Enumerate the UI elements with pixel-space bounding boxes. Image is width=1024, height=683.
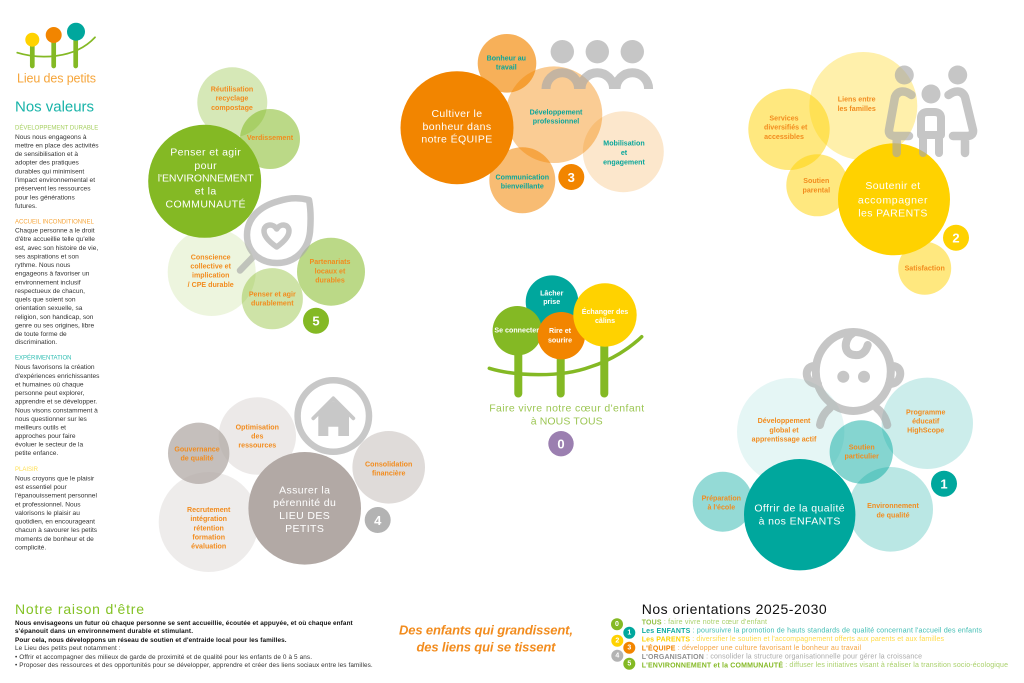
heading: parents: accompagner	[858, 194, 928, 206]
heading: équipe	[421, 108, 493, 146]
value: accueil inconditionnel: est, avec son histoire de vie,	[15, 245, 98, 252]
value: expérimentation: et humaines où chaque	[15, 382, 84, 388]
badge 0: 0	[557, 436, 565, 452]
tree labels: prise	[543, 298, 560, 306]
labels: environnement: Partenariats	[309, 258, 351, 266]
value: accueil inconditionnel: ses aspirations et son	[15, 253, 79, 260]
labels: parents: Liens entre	[838, 96, 876, 104]
labels: enfants: Préparation	[702, 494, 741, 502]
heading: organisation: pérennité du	[273, 497, 336, 509]
labels: parents: diversifiés et	[764, 124, 808, 132]
panel: enfants	[693, 332, 973, 570]
panel: environnement	[148, 67, 365, 334]
labels: organisation: évaluation	[191, 543, 226, 551]
heading: environnement: et la	[195, 186, 217, 198]
labels: équipe: Développement	[530, 108, 583, 116]
icon: baby	[807, 332, 900, 425]
heading: environnement: pour	[194, 160, 217, 172]
value: plaisir	[15, 467, 98, 552]
labels: parents	[764, 96, 945, 272]
labels: enfants: global et	[769, 426, 799, 434]
panel: nous tous	[489, 275, 644, 456]
value: accueil inconditionnel: de toute forme de	[15, 331, 67, 338]
value: expérimentation: EXPÉRIMENTATION	[15, 355, 71, 362]
value: expérimentation: personne peut explorer,	[15, 390, 84, 397]
tree labels: Rire et	[549, 327, 572, 335]
legend badges: 2	[615, 637, 619, 644]
panel: parents	[748, 52, 973, 295]
value: expérimentation: petite enfance.	[15, 450, 58, 457]
value: développement durable: pour les générations	[15, 194, 75, 201]
labels: équipe: et	[621, 149, 628, 157]
value: accueil inconditionnel: d'être accueillie telle qu'elle	[15, 236, 95, 243]
value: plaisir: quotidien, en encourageant	[15, 519, 95, 526]
labels: enfants: HighScope	[907, 427, 944, 435]
heading: nous tous: Faire vivre notre cœur d'enfant	[489, 403, 644, 415]
value: accueil inconditionnel: genre ou ses origines, libre	[15, 322, 95, 330]
labels: organisation: Recrutement	[187, 506, 231, 514]
value: expérimentation: apprendre et se développer.	[15, 399, 97, 406]
legend lines: L'ÉQUIPE : développer une culture favorisant le bonheur au travail	[642, 643, 861, 652]
heading: enfants: à nos ENFANTS	[759, 516, 841, 528]
tree labels: câlins	[595, 317, 615, 325]
labels: environnement: / CPE durable	[188, 281, 234, 289]
labels: organisation: Consolidation	[365, 460, 412, 468]
labels: enfants: de qualité	[876, 511, 910, 519]
tree labels: Se connecter	[494, 326, 539, 334]
labels: parents: Satisfaction	[905, 264, 945, 272]
value: expérimentation: évoluer le secteur de la	[15, 442, 84, 449]
legend lines: L'ENVIRONNEMENT et la COMMUNAUTÉ : diffuser les initiatives visant à réaliser la transition socio-écologique	[642, 660, 1008, 669]
value: expérimentation: Nous favorisons la création	[15, 364, 95, 371]
labels: enfants: éducatif	[912, 418, 940, 426]
circles: environnement	[148, 67, 365, 329]
heading: environnement: COMMUNAUTÉ	[165, 197, 246, 210]
value: plaisir: complicité.	[15, 544, 46, 552]
labels: enfants: à l'école	[707, 503, 735, 511]
legend badges: 3	[627, 644, 631, 651]
heading: nous tous: à NOUS TOUS	[531, 416, 603, 428]
labels: environnement: compostage	[211, 104, 253, 112]
value: plaisir: valorisons le plaisir au	[15, 510, 80, 517]
tagline: Des enfants qui grandissent,	[399, 622, 573, 638]
labels: environnement: recyclage	[216, 95, 248, 103]
labels: enfants: apprentissage actif	[752, 435, 817, 443]
legend badges: 5	[627, 660, 631, 667]
labels: équipe: travail	[496, 64, 517, 72]
labels: équipe: Mobilisation	[603, 140, 645, 148]
labels: environnement: Réutilisation	[211, 85, 253, 93]
tree circles	[493, 275, 637, 359]
badge 3	[558, 164, 584, 190]
heading: enfants: Offrir de la qualité	[754, 503, 845, 515]
heading: parents: les PARENTS	[858, 207, 928, 219]
value: accueil inconditionnel: Chaque personne a le droit	[15, 228, 95, 234]
heading: environnement: l'ENVIRONNEMENT	[158, 173, 254, 185]
labels: environnement: locaux et	[315, 267, 346, 275]
labels: environnement: Penser et agir	[249, 291, 296, 299]
value: plaisir: moments de bonheur et de	[15, 536, 94, 543]
labels: parents: accessibles	[764, 133, 804, 141]
tree labels: Échanger des	[582, 307, 628, 316]
text block: raison d'être: Le Lieu des petits peut notamment :	[15, 645, 121, 652]
labels: organisation: formation	[192, 533, 225, 541]
value: développement durable: Nous nous engageons à	[15, 134, 87, 141]
labels: équipe	[487, 54, 646, 190]
heading: environnement: Penser et agir	[170, 147, 241, 159]
value: développement durable: futures.	[15, 203, 37, 210]
legend lines: Les PARENTS : diversifier le soutien et l'accompagnement offerts aux parents et aux familles	[642, 636, 944, 643]
panel: organisation	[159, 380, 425, 572]
value: plaisir: et professionnel. Nous	[15, 501, 81, 508]
heading: parents: Soutenir et	[865, 180, 921, 192]
value: développement durable: DÉVELOPPEMENT DURABLE	[15, 124, 98, 131]
text block: raison d'être: s'épanouit dans un environnement durable et stimulant.	[15, 628, 193, 635]
heading: équipe: Cultiver le	[431, 108, 483, 120]
labels: environnement: implication	[192, 272, 229, 280]
heading: Nos valeurs: Nos valeurs	[15, 98, 94, 116]
tagline: des liens qui se tissent	[416, 640, 556, 654]
values text column	[15, 124, 100, 552]
value: développement durable: mettre en place des activités	[15, 142, 99, 150]
labels: équipe: Bonheur au	[487, 54, 526, 62]
heading: équipe: notre ÉQUIPE	[421, 133, 493, 146]
value: accueil inconditionnel: religion, son handicap, son	[15, 314, 94, 321]
legend lines	[642, 619, 1008, 669]
circles: équipe	[400, 34, 664, 213]
badge 4	[365, 507, 391, 533]
labels: organisation: financière	[372, 469, 406, 477]
badge 3: 3	[568, 170, 575, 185]
labels: environnement: collective et	[190, 262, 232, 270]
labels: enfants: Développement	[758, 417, 811, 425]
labels: environnement: durablement	[251, 300, 294, 308]
icon: three people	[546, 40, 649, 89]
circles: enfants	[693, 378, 973, 570]
value: développement durable: adopter des pratiques	[15, 160, 79, 167]
heading: organisation	[273, 484, 336, 535]
badge 0	[548, 431, 574, 456]
badge 2	[943, 225, 969, 251]
value: plaisir: l'épanouissement personnel	[15, 493, 97, 500]
value: accueil inconditionnel: respectueux de chacun,	[15, 288, 85, 295]
value: accueil inconditionnel: discrimination.	[15, 339, 57, 346]
heading: parents	[858, 180, 928, 219]
badge 1: 1	[940, 476, 948, 492]
value: plaisir: Nous croyons que le plaisir	[15, 476, 95, 482]
labels: environnement: Conscience	[191, 253, 231, 261]
tree labels: sourire	[548, 336, 572, 344]
value: expérimentation: meilleurs outils et	[15, 424, 66, 432]
labels: organisation: des	[251, 432, 263, 440]
value: expérimentation: approches pour faire	[15, 433, 76, 440]
labels: organisation	[174, 423, 412, 551]
legend badges: 4	[615, 652, 619, 659]
labels: organisation: de qualité	[180, 455, 214, 463]
value: accueil inconditionnel: environnement inclusif	[15, 279, 81, 286]
labels: équipe: Communication	[495, 173, 549, 181]
tree labels: Lâcher	[540, 289, 564, 297]
labels: enfants: Programme	[906, 408, 945, 416]
heading: équipe: bonheur dans	[422, 121, 492, 133]
circles: organisation	[159, 397, 425, 572]
heading: organisation: LIEU DES	[279, 510, 330, 522]
value: expérimentation	[15, 355, 100, 457]
badge 2: 2	[952, 230, 960, 246]
text block: raison d'être: Pour cela, nous développons un réseau de soutien et d'entraide local pour les familles.	[15, 637, 287, 644]
labels: enfants: Soutien	[849, 444, 875, 452]
value: plaisir: est essentiel pour	[15, 484, 67, 491]
legend lines: L'ORGANISATION : consolider la structure organisationnelle pour gérer la croissance	[642, 654, 922, 660]
value: plaisir: chacun à savourer les petits	[15, 527, 98, 534]
legend badges: 1	[627, 629, 631, 636]
legend lines: Les ENFANTS : poursuivre la promotion de hauts standards de qualité concernant l'accueil des enfants	[642, 628, 982, 634]
value: accueil inconditionnel: quels que soient son	[15, 297, 76, 304]
text block: raison d'être	[15, 620, 373, 669]
icon: family	[889, 66, 973, 153]
text block: raison d'être: Nous envisageons un futur où chaque personne se sent accueillie, écoutée et appuyée, et où chaque enfant	[15, 620, 354, 627]
value: accueil inconditionnel	[15, 219, 98, 346]
circles: parents	[748, 52, 951, 295]
legend lines: TOUS : faire vivre notre cœur d'enfant	[642, 619, 767, 626]
value: développement durable: de sensibilisation et à	[15, 151, 78, 158]
value: accueil inconditionnel: orientation sexuelle, sa	[15, 305, 83, 312]
labels: environnement: Verdissement	[247, 134, 294, 142]
logo	[17, 23, 96, 86]
value: expérimentation: Nous visons constamment à	[15, 407, 98, 414]
value: accueil inconditionnel: rythme. Nous nous	[15, 262, 71, 269]
value: plaisir: PLAISIR	[15, 467, 39, 473]
labels: organisation: intégration	[190, 515, 227, 523]
labels: enfants: particulier	[845, 453, 879, 461]
labels: équipe: professionnel	[533, 117, 579, 125]
legend badges	[611, 618, 635, 670]
labels: enfants: Environnement	[867, 502, 919, 510]
tree trunks and ground line	[489, 337, 642, 394]
badge 4: 4	[374, 513, 382, 528]
labels: enfants	[702, 408, 945, 519]
labels: organisation: Gouvernance	[174, 445, 220, 453]
heading: nos orientations: Nos orientations 2025-2030	[642, 601, 827, 617]
heading: nous tous	[489, 403, 644, 428]
labels: organisation: Optimisation	[236, 423, 279, 431]
labels: parents: les familles	[838, 105, 876, 113]
value: expérimentation: nous questionner sur les	[15, 416, 88, 423]
heading: enfants	[754, 503, 845, 528]
value: accueil inconditionnel: engageons à favoriser un	[15, 271, 90, 278]
value: développement durable: l'impact environnemental et	[15, 177, 95, 184]
badge 5	[303, 308, 329, 334]
value: expérimentation: d'expériences enrichissantes	[15, 373, 100, 380]
tagline	[399, 622, 573, 654]
labels: parents: Soutien	[803, 177, 829, 185]
logo: Lieu des petits	[17, 72, 96, 86]
labels: parents: parental	[802, 186, 830, 194]
labels: organisation: rétention	[194, 524, 224, 532]
text block: raison d'être: • Offrir et accompagner des milieux de garde de proximité et de qualité pour les enfants de 0 à 5 ans.	[15, 654, 312, 661]
value: développement durable: durables qui minimisent	[15, 168, 84, 175]
tree labels	[494, 289, 628, 344]
value: accueil inconditionnel: ACCUEIL INCONDITIONNEL	[15, 219, 94, 225]
badge 1	[931, 471, 957, 497]
heading: environnement	[158, 147, 254, 210]
heading: organisation: Assurer la	[279, 484, 330, 496]
legend badges: 0	[615, 621, 619, 628]
text block: raison d'être: • Proposer des ressources et des opportunités pour se développer, apprendre et créer des liens sociaux entre les familles.	[15, 662, 373, 669]
orientations legend	[611, 618, 1008, 670]
labels: parents: Services	[769, 114, 799, 122]
heading: notre raison d'être: Notre raison d'être	[15, 601, 144, 617]
badge 5: 5	[312, 314, 320, 328]
labels: environnement: durables	[315, 276, 345, 284]
panel: équipe	[400, 34, 664, 213]
icon: house in ring	[298, 380, 369, 452]
value: développement durable	[15, 124, 99, 210]
labels: équipe: bienveillante	[501, 182, 544, 190]
heading: organisation: PETITS	[285, 523, 324, 535]
value: développement durable: préservent les ressources	[15, 186, 91, 193]
icon: leaf with heart	[240, 198, 311, 270]
labels: équipe: engagement	[603, 158, 646, 166]
labels: environnement	[188, 85, 351, 308]
labels: organisation: ressources	[238, 442, 276, 450]
